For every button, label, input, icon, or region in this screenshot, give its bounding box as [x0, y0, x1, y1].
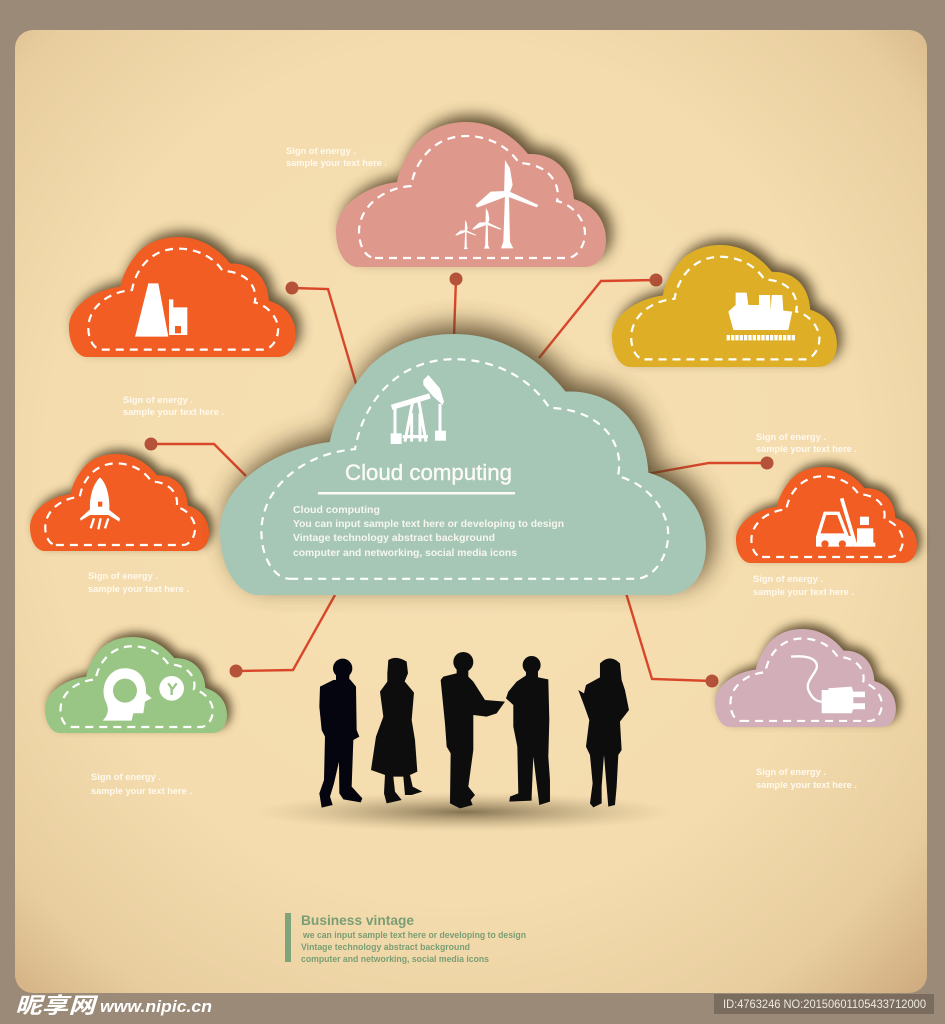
panel: factory cloud: [69, 231, 301, 357]
panel: forklift cloud: [736, 462, 921, 563]
cloud: orange: [69, 231, 301, 357]
business vintage block: [285, 912, 526, 964]
caption: factory: sample your text here .: [123, 407, 224, 417]
cloud: yellow: [612, 239, 842, 367]
cloud: lilac: [715, 624, 900, 727]
watermark id box: [714, 994, 934, 1014]
icon: power plug: [791, 656, 865, 713]
caption: ship: Sign of energy .: [756, 432, 826, 442]
body text: Vintage technology abstract background: [293, 532, 495, 544]
body text: [293, 504, 564, 559]
caption: wind energy: Sign of energy .: [286, 146, 356, 156]
person 2: [371, 658, 422, 803]
panel: ship cloud: [612, 239, 842, 367]
heading: cloud computing: Cloud computing: [345, 460, 512, 485]
body text: computer and networking, social media icons: [293, 547, 517, 559]
body text: Cloud computing: [293, 504, 380, 516]
watermark logo: 昵享网: [15, 988, 99, 1020]
icon: rocket: [80, 477, 120, 529]
caption: ship: sample your text here .: [756, 444, 857, 454]
caption: forklift: [753, 574, 854, 597]
watermark id box: ID:4763246 NO:20150601105433712000: [723, 997, 926, 1011]
text lines: computer and networking, social media icons: [301, 954, 489, 964]
person 3: [441, 652, 505, 808]
heading: Business vintage: [301, 912, 414, 928]
icon: wind turbines: [455, 160, 538, 249]
icon: factory: [135, 283, 187, 337]
caption: rocket: sample your text here .: [88, 584, 189, 594]
heading underline: [318, 492, 515, 494]
caption: mind: [91, 772, 192, 796]
panel: central cloud: [220, 325, 713, 595]
cloud: green: [45, 632, 231, 733]
caption: rocket: Sign of energy .: [88, 571, 158, 581]
body text: You can input sample text here or developing to design: [293, 518, 564, 530]
watermark logo: [15, 988, 212, 1020]
icon: forklift: [816, 498, 875, 548]
icon: oil pump: [391, 375, 446, 444]
cloud: pink: [336, 115, 612, 267]
cloud: orange: [736, 462, 921, 563]
caption: mind: Sign of energy .: [91, 772, 161, 782]
person 4: [506, 656, 550, 805]
caption: plug: Sign of energy .: [756, 767, 826, 777]
panel: rocket cloud: [30, 449, 213, 551]
ground shadow: [255, 792, 675, 832]
caption: plug: [756, 767, 857, 790]
caption: wind energy: sample your text here .: [286, 158, 387, 168]
caption: ship: [756, 432, 857, 454]
person 5: [578, 658, 629, 807]
panel: power plug cloud: [715, 624, 900, 727]
caption: forklift: Sign of energy .: [753, 574, 823, 584]
person 1: [319, 659, 362, 808]
panel: wind energy cloud: [336, 115, 612, 267]
accent bar: [285, 913, 291, 962]
caption: factory: Sign of energy .: [123, 395, 193, 405]
silhouettes: business people: [319, 652, 629, 808]
text lines: Vintage technology abstract background: [301, 942, 470, 952]
caption: plug: sample your text here .: [756, 780, 857, 790]
icon: head with idea: [103, 668, 184, 721]
panel: mind cloud: [45, 632, 231, 733]
caption: wind energy: [286, 146, 387, 168]
text lines: we can input sample text here or developing to design: [302, 930, 526, 940]
cloud: teal: [220, 325, 713, 595]
text lines: [301, 930, 526, 964]
watermark logo: www.nipic.cn: [100, 997, 212, 1016]
icon: cargo ship: [727, 293, 795, 338]
cloud: orange: [30, 449, 213, 551]
connector dots: [144, 272, 774, 688]
caption: factory: [123, 395, 224, 417]
connector lines: [151, 279, 767, 681]
caption: mind: sample your text here .: [91, 786, 192, 796]
caption: forklift: sample your text here .: [753, 587, 854, 597]
caption: rocket: [88, 571, 189, 594]
